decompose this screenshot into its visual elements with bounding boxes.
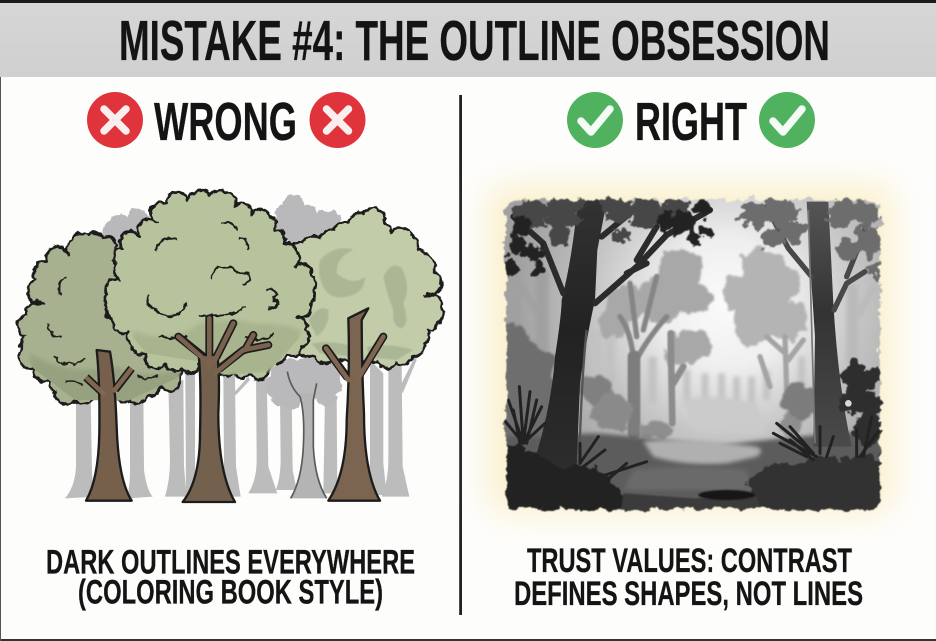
background grey crowns (103, 194, 342, 410)
wrong label: WRONG (154, 92, 297, 152)
right label: RIGHT (635, 92, 747, 152)
right tree trunk (326, 308, 383, 501)
icon: green check left (567, 92, 623, 148)
mid-ground foliage (597, 247, 807, 365)
fog background (502, 194, 885, 444)
divider (459, 95, 462, 615)
illustration: outlined trees (17, 190, 443, 502)
center tree trunk (178, 318, 268, 502)
right caption (514, 542, 863, 613)
right heading (567, 92, 815, 152)
right tree crown (286, 208, 443, 368)
panel: right (488, 92, 893, 613)
center tree leaf details (133, 222, 300, 377)
foreground left tree (513, 193, 710, 470)
warm glow behind painting (488, 185, 893, 513)
foreground bushes and ferns (500, 363, 886, 483)
icon: red cross left (87, 92, 143, 148)
left tree trunk (86, 350, 132, 501)
panel: wrong (17, 92, 443, 612)
ground and path (500, 430, 887, 517)
left tree crown (17, 233, 200, 404)
foreground right tree (767, 202, 870, 447)
wrong caption (46, 544, 415, 612)
title banner (0, 3, 936, 77)
background grey trunks (65, 357, 417, 498)
wrong heading (87, 92, 366, 152)
wrong caption: (COLORING BOOK STYLE) (78, 574, 383, 612)
center tree crown (105, 190, 316, 379)
icon: green check right (759, 92, 815, 148)
illustration: value painting of a misty forest (493, 187, 893, 520)
middle bushes (503, 320, 818, 447)
wrong caption: DARK OUTLINES EVERYWHERE (46, 544, 415, 582)
left canopy foliage (501, 192, 713, 277)
outlined grey tree trunk (287, 372, 327, 498)
mid-ground trees (620, 277, 803, 433)
distant trunks (532, 271, 865, 414)
right canopy foliage (739, 197, 885, 278)
icon: red cross right (310, 92, 366, 148)
right tree mottled patches (308, 248, 413, 360)
left tree leaf details (30, 277, 180, 413)
